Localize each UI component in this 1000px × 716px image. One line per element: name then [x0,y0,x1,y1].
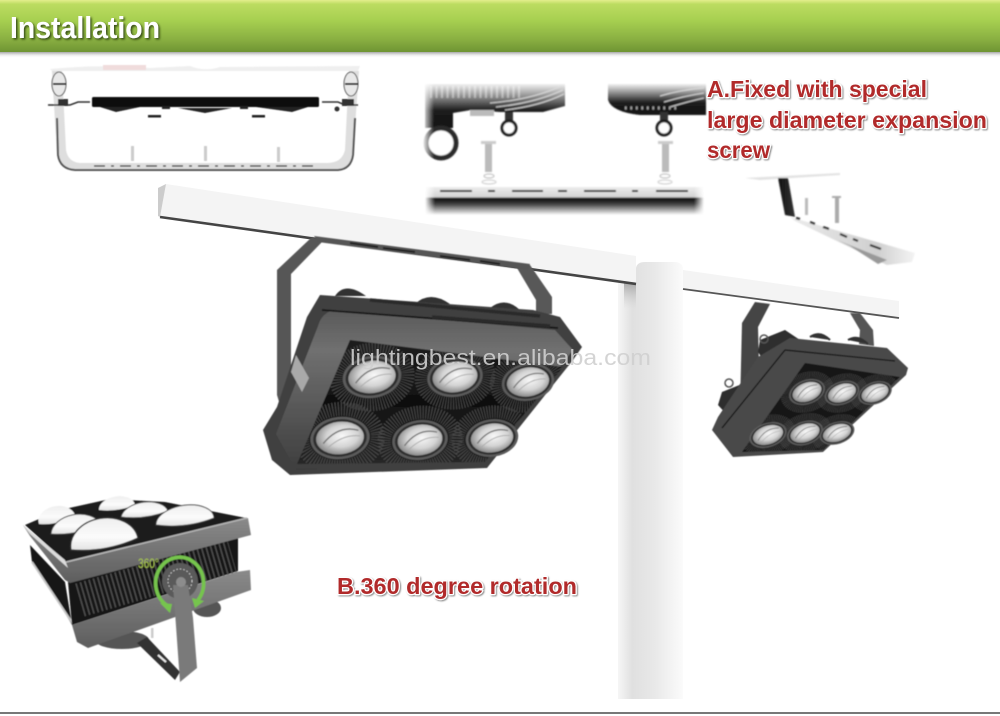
heat sink fins [299,345,564,472]
rail [425,187,704,215]
yoke arm [173,585,197,682]
lens bottom-right [817,417,857,449]
rotation label: 360° [138,556,159,571]
left hinge [291,355,309,392]
left beam segment [160,184,636,284]
left side fins [30,545,72,625]
left fin fragment [425,84,565,128]
pole [618,262,683,699]
lens top-middle [821,376,863,410]
lens top-right [855,377,895,409]
lens bottom-middle [784,416,826,450]
watermark: lightingbest.en.alibaba.com [350,345,651,370]
small floodlight mounted on beam [712,302,908,457]
back heat sink bumps [335,288,520,310]
top plate [25,499,246,562]
lens top-right [499,359,557,405]
bolts [481,141,496,144]
large floodlight mounted on beam [263,236,582,475]
diagram: top view bracket with fixture [48,65,360,170]
heat sink fins [744,371,896,452]
large ring [426,128,456,158]
right side fins [68,538,238,625]
screws [131,146,134,161]
black fin face [297,340,563,464]
dome left [51,514,101,534]
small ring left [505,112,513,121]
lens bottom-left [746,418,790,452]
diagram: angled bracket detail [745,173,915,265]
upper rim [23,518,251,583]
support beam [158,184,899,318]
rotation arrow [156,557,204,606]
footer rule [0,712,1000,714]
lens bottom-middle [390,417,450,463]
body [712,338,908,457]
mounting bracket [740,302,770,407]
hinge disc [162,563,198,599]
raised frame [276,310,573,470]
right beam segment [683,270,899,318]
header band [0,0,1000,58]
dome middle [121,502,168,518]
dome back-left [38,506,75,524]
callout A: large diameter expansion [707,107,987,133]
callout A: screw [707,137,770,163]
lower strap [137,637,180,680]
black fin face [742,363,900,452]
U bracket [52,71,359,170]
callout A [707,76,987,163]
lens top-left [340,352,404,402]
body [263,295,582,475]
small ring right [660,112,668,121]
callout B: B.360 degree rotation [337,573,577,599]
dome back-middle [99,496,135,510]
lens bottom-left [308,414,372,462]
lens top-left [785,374,829,410]
title: Installation [10,10,160,45]
slots [94,165,318,167]
back heat sinks [758,330,800,370]
lower rim [72,570,251,648]
rear-view floodlight with 360 degree rotation [23,496,251,682]
callout A: A.Fixed with special [707,76,927,102]
lens top-middle [425,354,485,400]
dome front [71,518,138,550]
fixture profile [92,97,319,107]
lens bottom-right [463,416,521,460]
dome right [156,505,214,526]
right fin fragment [608,84,706,115]
diagram: expansion screw detail [422,84,706,215]
mounting bracket [277,236,552,415]
lower heat sinks [95,631,149,649]
